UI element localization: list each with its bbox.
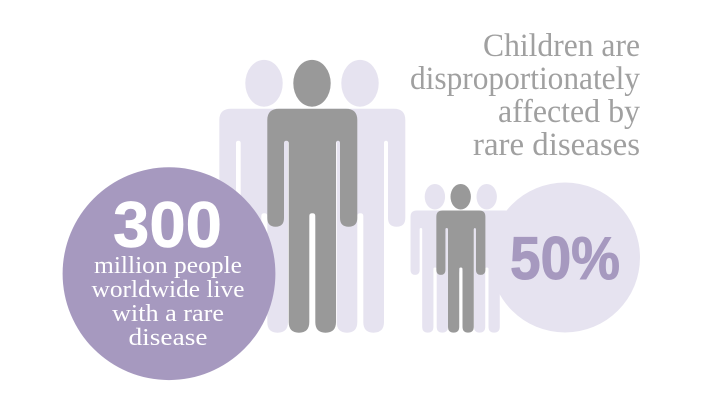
callout: 300 million people: million people [94, 253, 242, 279]
icon: large dark figure, centre [267, 60, 357, 333]
heading: children statement [410, 28, 640, 163]
icon: small light figure, left [411, 184, 460, 333]
heading: children statement: affected by [498, 94, 640, 130]
icon: small light figure, right [462, 184, 511, 333]
callout: 300 million people: disease [128, 325, 208, 351]
callout: 300 million people [63, 167, 275, 380]
callout: 300 million people: worldwide live [92, 277, 244, 303]
icon: large light figure, left [219, 60, 309, 333]
circle: 50% statistic [490, 182, 640, 332]
callout: 300 million people: with a rare [112, 301, 224, 327]
circle: 50% statistic: 50% [510, 225, 620, 292]
heading: children statement: disproportionately [410, 61, 640, 97]
icon: large light figure, right [315, 60, 405, 333]
callout: 300 million people: 300 [113, 188, 222, 261]
heading: children statement: rare diseases [473, 127, 640, 163]
icon: small dark figure, centre [436, 184, 485, 333]
heading: children statement: Children are [483, 28, 640, 64]
